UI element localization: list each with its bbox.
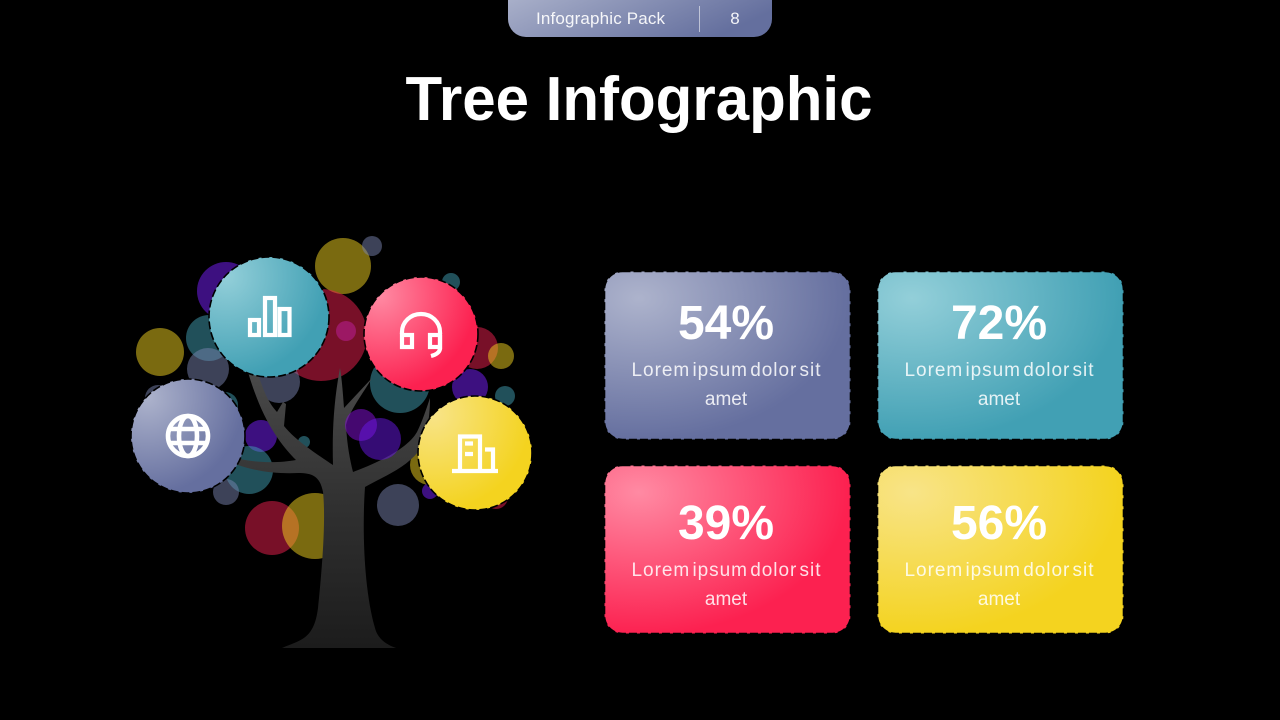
node: globe [131, 379, 245, 493]
node: building [418, 396, 532, 510]
card: 54%: amet [705, 389, 748, 410]
description: Lorem ipsum dolor sit [904, 560, 1094, 581]
title: Tree Infographic [406, 65, 872, 134]
tree infographic [131, 236, 532, 648]
description: Lorem ipsum dolor sit [904, 360, 1094, 381]
card: 72% [878, 272, 1124, 440]
tab label: Infographic Pack [536, 9, 666, 28]
foreground purple bubbles [345, 409, 401, 460]
card: 54% [604, 272, 850, 440]
header tab [508, 0, 772, 37]
value: 56% [951, 497, 1047, 550]
description: Lorem ipsum dolor sit [632, 360, 821, 381]
value: 72% [951, 297, 1047, 350]
card: 56% [878, 466, 1124, 634]
icon: headset [402, 314, 440, 356]
tree trunk and branches [238, 368, 430, 648]
page number: 8 [730, 9, 740, 28]
node: bar chart [209, 257, 329, 377]
background bubbles [136, 236, 515, 559]
card: 72%: amet [978, 389, 1021, 410]
icon: globe [168, 416, 208, 456]
node: headset [364, 277, 478, 391]
card: 56%: amet [978, 589, 1021, 610]
card: 39%: amet [705, 589, 748, 610]
card: 39% [604, 466, 850, 634]
icon: building [452, 436, 498, 471]
description: Lorem ipsum dolor sit [632, 560, 821, 581]
value: 54% [678, 297, 774, 350]
icon: bar chart [250, 298, 290, 335]
value: 39% [678, 497, 774, 550]
